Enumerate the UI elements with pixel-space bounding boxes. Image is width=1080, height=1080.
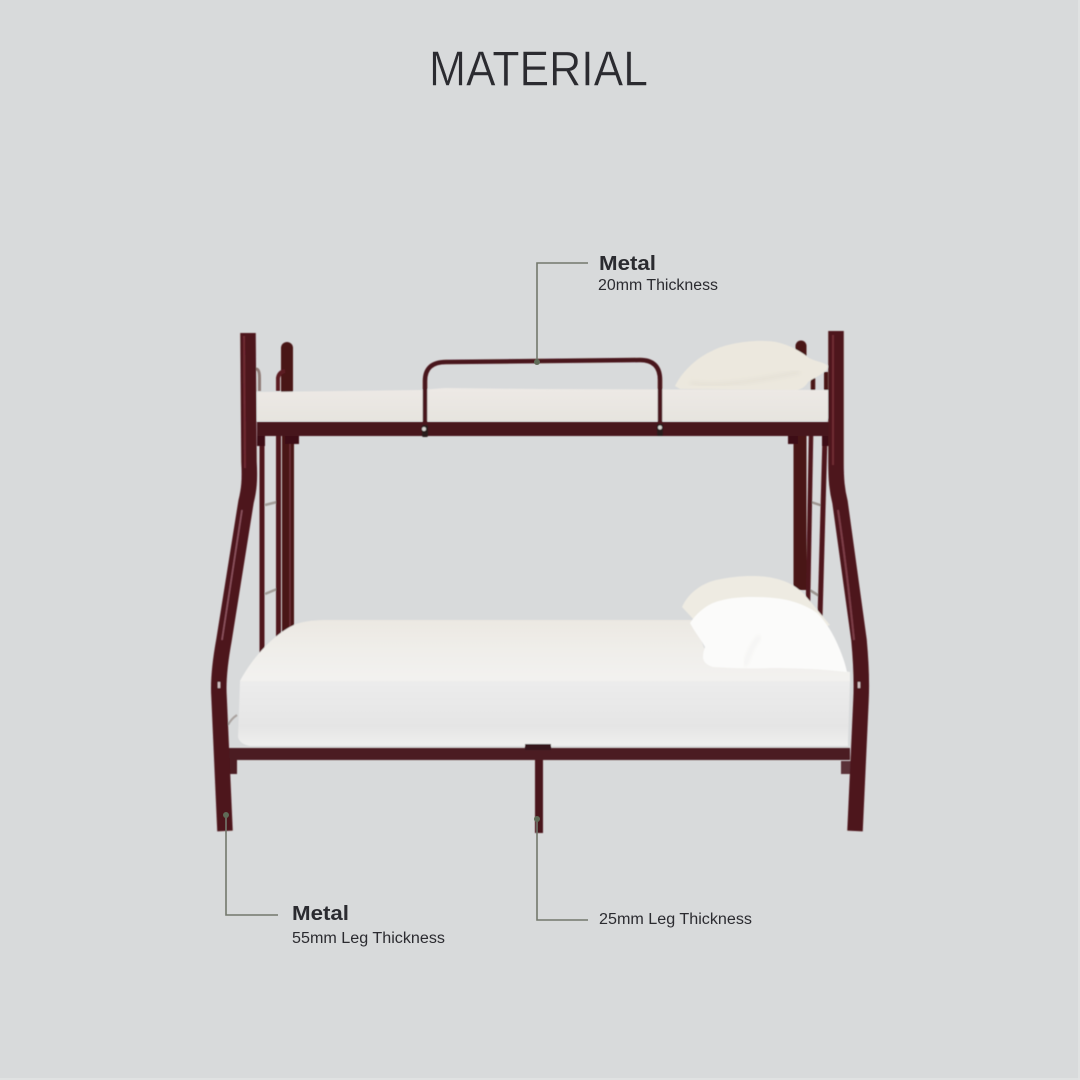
callout: metal 55mm leg: 55mm Leg Thickness [292, 930, 445, 947]
callout: metal 20mm: Metal [599, 253, 656, 275]
centre leg [535, 760, 543, 833]
upper rail [257, 422, 830, 436]
bunk bed [219, 331, 861, 833]
callout: metal 20mm: 20mm Thickness [598, 277, 718, 294]
lower back pillow [682, 576, 830, 650]
callout: metal 55mm leg: Metal [292, 903, 349, 925]
callout: metal 20mm [534, 253, 718, 365]
lower rail [228, 744, 851, 774]
lower mattress [238, 620, 850, 746]
rear posts and ladders [256, 346, 830, 658]
callout: 25mm leg: 25mm Leg Thickness [599, 911, 752, 928]
right tall post [833, 331, 861, 831]
title: MATERIAL [429, 42, 648, 96]
callout: metal 55mm leg [223, 812, 445, 947]
left tall post [219, 333, 249, 831]
lower front pillow [690, 597, 847, 672]
guard rail [422, 360, 663, 437]
upper mattress [257, 388, 828, 421]
upper pillow [675, 341, 828, 390]
callout: 25mm leg [534, 816, 752, 928]
